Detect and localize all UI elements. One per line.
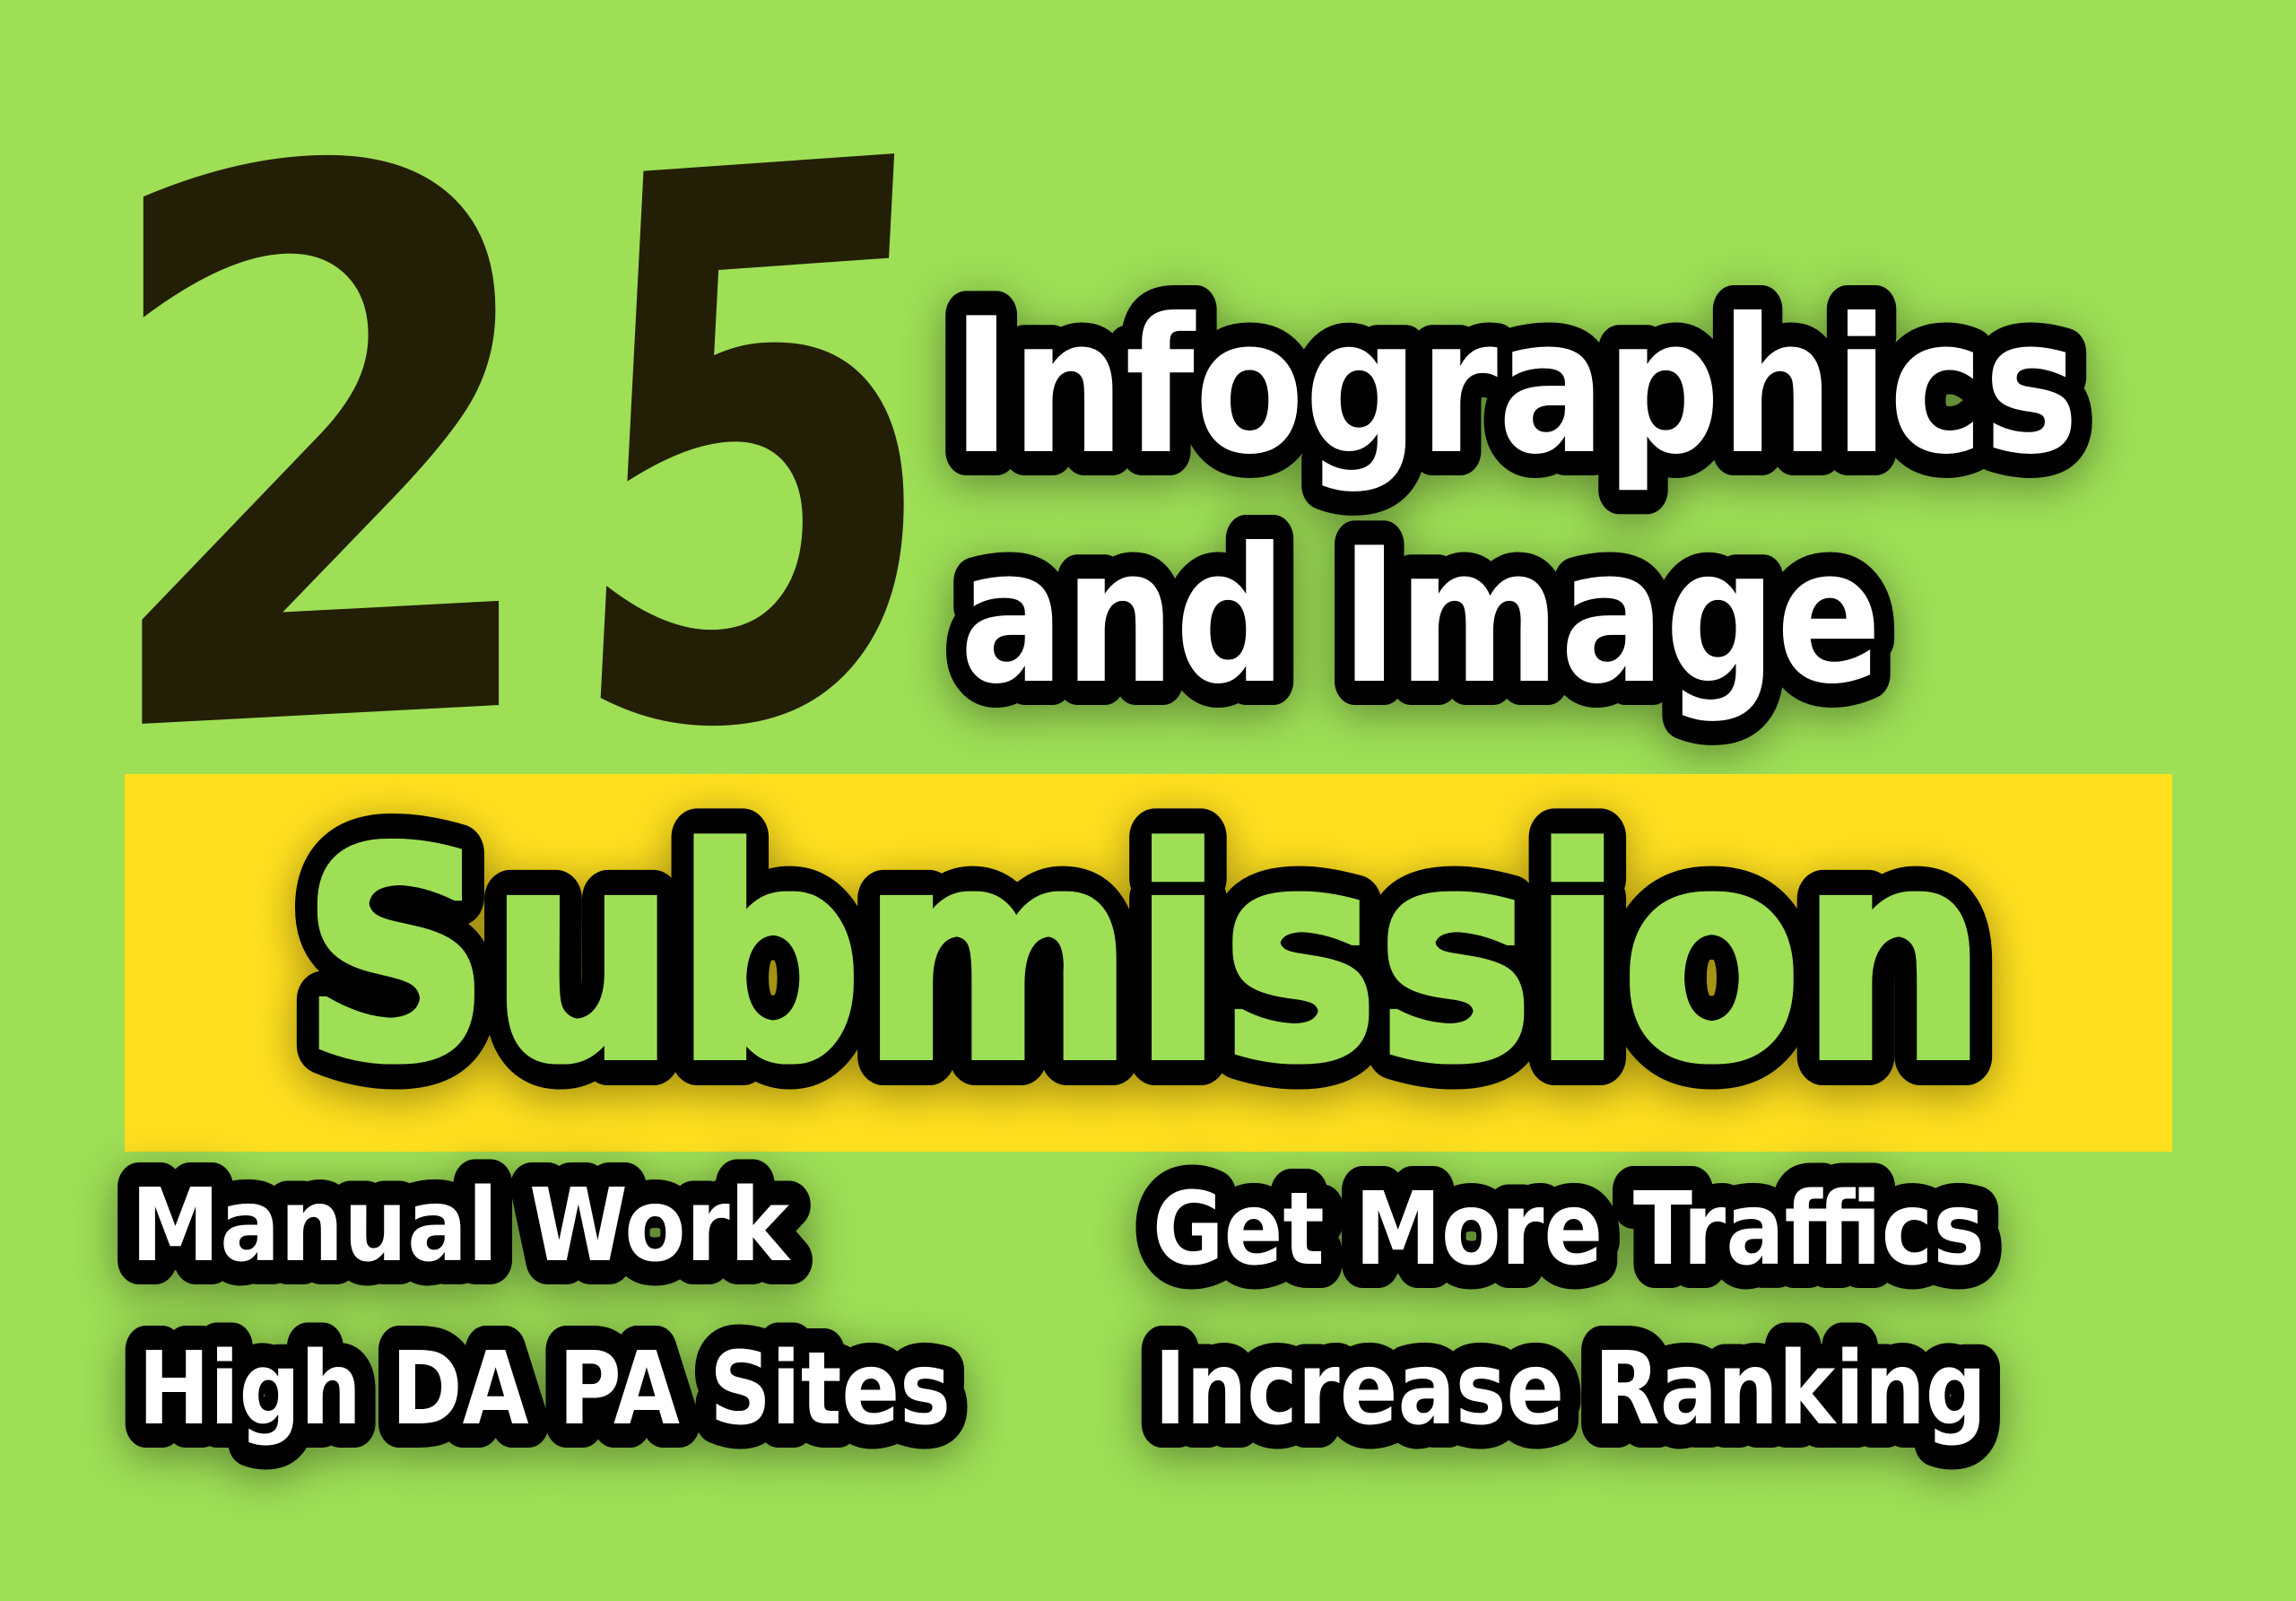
feature: Manual Work: Manual Work bbox=[131, 1168, 791, 1284]
heading: and Image: and Image bbox=[960, 509, 1882, 726]
big number 25: 2 bbox=[89, 4, 557, 905]
banner title: Submission: Submission bbox=[302, 788, 1987, 1125]
big number 25: 5 bbox=[549, 0, 968, 905]
feature: High DA PA Sites: High DA PA Sites bbox=[138, 1331, 951, 1448]
yellow banner bbox=[125, 774, 2172, 1152]
big number 25 bbox=[89, 0, 968, 905]
heading: Infographics: Infographics bbox=[952, 279, 2079, 496]
feature: Get More Traffics: Get More Traffics bbox=[1152, 1171, 1985, 1288]
feature: Increase Ranking: Increase Ranking bbox=[1154, 1331, 1987, 1448]
